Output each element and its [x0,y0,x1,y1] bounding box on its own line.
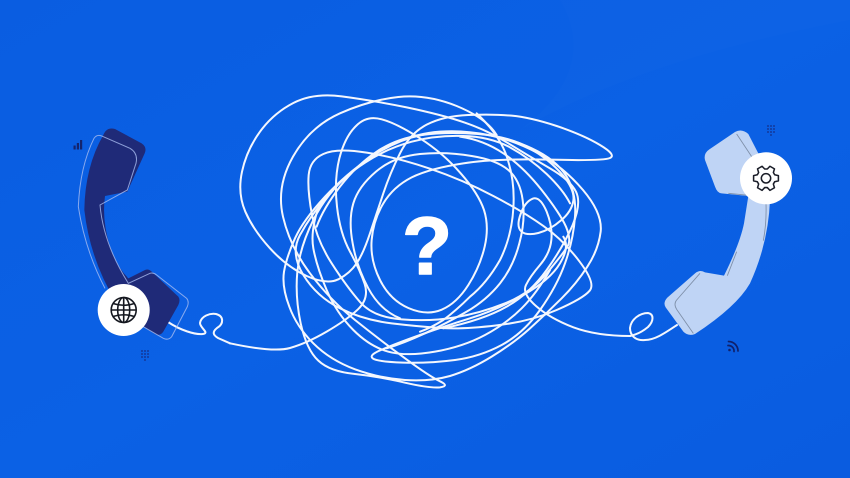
left cord [168,314,230,343]
scribble tangle [230,95,630,387]
globe badge [98,284,150,336]
signal bars icon [74,140,82,150]
scribble lower arc [312,203,550,354]
badge circle [740,152,792,204]
right phone handset [664,131,770,335]
left phone handset [78,128,188,339]
badge circle [98,284,150,336]
scribble large outer loops [281,96,601,387]
scribble crossing loops [296,136,591,328]
scribble vertical arc [420,113,514,332]
dark handset body [84,128,179,335]
scribble line from left cord [230,95,612,350]
keypad icon right [767,125,775,136]
keypad icon left [141,350,149,361]
question mark: ? [402,201,452,292]
right cord [630,313,677,340]
scribble inner ring [351,153,524,348]
settings badge [740,152,792,204]
wifi icon [728,342,738,352]
globe icon [111,298,136,322]
light handset body [664,131,770,335]
handset inner lines [675,134,766,333]
handset outline offset [78,135,188,339]
gear icon [754,166,778,190]
background wave shape [520,0,850,130]
scribble line from right cord [317,133,630,336]
